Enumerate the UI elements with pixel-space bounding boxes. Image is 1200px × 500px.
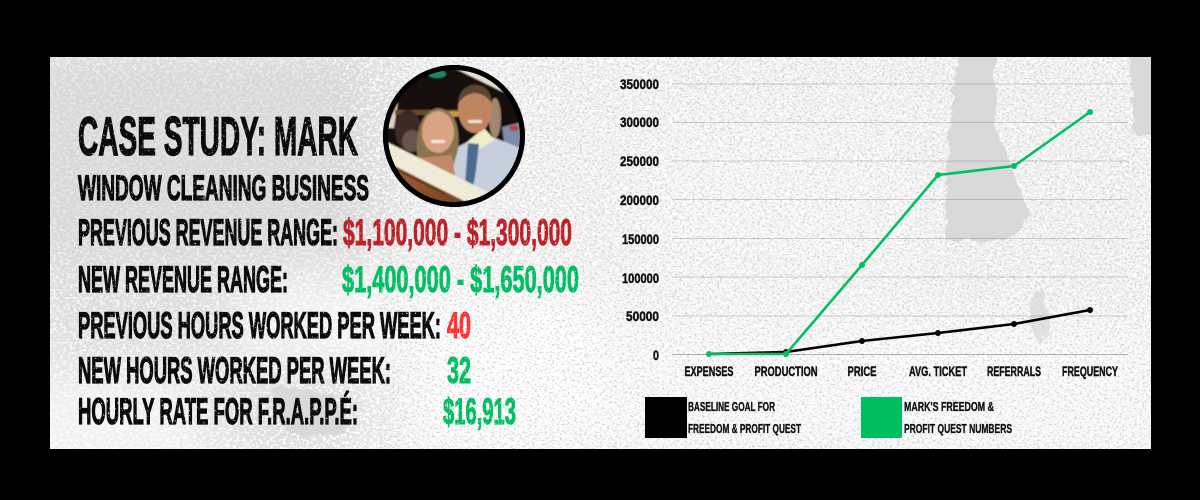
- legend: baseline goal: FREEDOM & PROFIT QUEST: [688, 422, 801, 436]
- subtitle: WINDOW CLEANING BUSINESS: [78, 169, 369, 208]
- woman hair and body: [417, 108, 459, 170]
- legend: baseline goal: BASELINE GOAL FOR: [688, 400, 775, 414]
- wooden frame: [383, 142, 490, 205]
- baseline series: [709, 307, 1093, 355]
- woman face: [422, 111, 454, 153]
- man head: [458, 85, 492, 133]
- previous revenue range: PREVIOUS REVENUE RANGE:: [78, 212, 338, 253]
- hourly rate: HOURLY RATE FOR F.R.A.P.P.É:: [78, 391, 358, 432]
- previous hours: 40: [447, 305, 471, 346]
- x axis labels: REFERRALS: [987, 364, 1041, 379]
- legend: baseline goal: [645, 397, 801, 438]
- x axis labels: [684, 364, 1118, 379]
- previous hours: [78, 305, 471, 346]
- previous hours: PREVIOUS HOURS WORKED PER WEEK:: [78, 305, 441, 346]
- new hours: NEW HOURS WORKED PER WEEK:: [78, 350, 391, 391]
- legend: Mark's numbers: PROFIT QUEST NUMBERS: [904, 422, 1012, 436]
- new revenue range: NEW REVENUE RANGE:: [78, 259, 288, 300]
- x axis labels: FREQUENCY: [1062, 364, 1118, 379]
- Mark's series: [706, 109, 1093, 357]
- new hours: [78, 350, 471, 391]
- y axis labels: [620, 77, 659, 363]
- y axis labels: 150000: [622, 232, 659, 247]
- y axis labels: 250000: [620, 154, 659, 169]
- gridlines: [672, 84, 1128, 354]
- y axis labels: 50000: [626, 309, 659, 324]
- y axis labels: 100000: [622, 271, 659, 286]
- panel: case study details: [78, 105, 579, 432]
- hourly rate: $16,913: [443, 391, 516, 432]
- y axis labels: 350000: [620, 77, 659, 92]
- new revenue range: $1,400,000 - $1,650,000: [342, 259, 579, 300]
- previous revenue range: $1,100,000 - $1,300,000: [343, 212, 572, 253]
- y axis labels: 0: [653, 348, 659, 363]
- y axis labels: 300000: [620, 115, 659, 130]
- title: CASE STUDY: MARK: [78, 105, 358, 167]
- x axis labels: PRODUCTION: [754, 364, 818, 379]
- photo: couple portrait in circle: [383, 65, 525, 210]
- legend: Mark's numbers: [861, 397, 1012, 438]
- panel: textured background: [50, 50, 1158, 449]
- x axis labels: AVG. TICKET: [909, 364, 968, 379]
- x axis labels: PRICE: [848, 364, 876, 379]
- legend: Mark's numbers: MARK'S FREEDOM &: [904, 400, 994, 414]
- man body: [450, 136, 520, 194]
- x axis labels: EXPENSES: [684, 364, 734, 379]
- y axis labels: 200000: [620, 193, 659, 208]
- new hours: 32: [447, 350, 471, 391]
- line chart: [620, 77, 1128, 379]
